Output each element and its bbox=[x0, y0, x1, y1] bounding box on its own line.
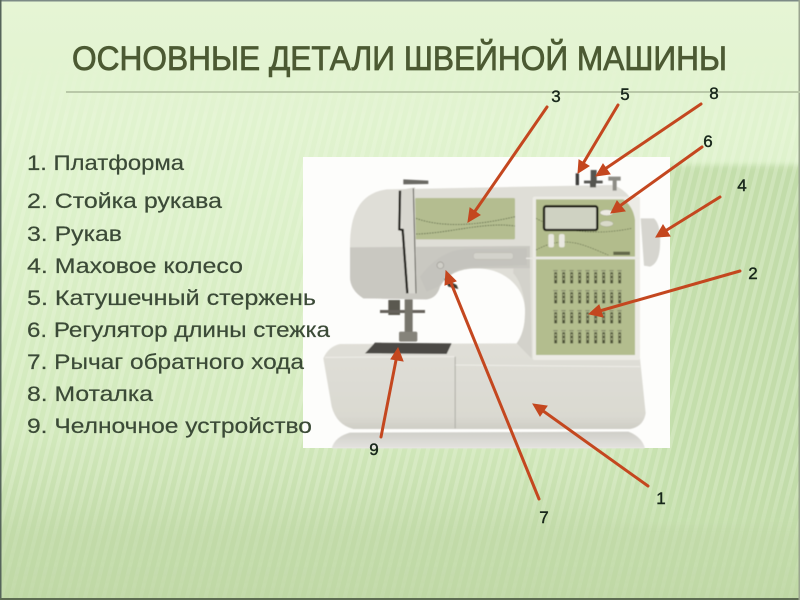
display section bbox=[536, 199, 635, 257]
reverse lever bbox=[444, 278, 458, 289]
machine base bbox=[323, 343, 646, 429]
arm front panel bbox=[415, 198, 515, 239]
reverse lever button bbox=[437, 262, 444, 269]
base top edge bbox=[325, 357, 640, 367]
column side bbox=[513, 268, 532, 358]
number 3: 3 bbox=[551, 87, 561, 106]
arrow 7 bbox=[445, 271, 539, 499]
callout numbers bbox=[369, 84, 758, 527]
machine arm bbox=[350, 185, 640, 359]
sewing machine bbox=[323, 170, 660, 448]
number 7: 7 bbox=[539, 508, 549, 527]
list item 5: 5. Катушечный стержень bbox=[27, 287, 316, 310]
model badge bbox=[613, 252, 630, 255]
number 6: 6 bbox=[703, 132, 713, 151]
number 9: 9 bbox=[369, 440, 379, 459]
arrow 5 bbox=[578, 105, 618, 173]
machine reflection bbox=[332, 432, 645, 448]
list item 1: 1. Платформа bbox=[27, 152, 184, 175]
title: ОСНОВНЫЕ ДЕТАЛИ ШВЕЙНОЙ МАШИНЫ bbox=[72, 40, 727, 78]
arrow 9 bbox=[381, 348, 403, 437]
arrow 4 bbox=[656, 197, 720, 237]
number 2: 2 bbox=[748, 264, 758, 283]
handwheel bbox=[641, 218, 660, 267]
arrows bbox=[381, 104, 740, 499]
number 5: 5 bbox=[620, 85, 630, 104]
number 1: 1 bbox=[656, 489, 666, 508]
arrow 6 bbox=[611, 147, 702, 213]
title rule bbox=[66, 91, 800, 93]
list item 8: 8. Моталка bbox=[27, 383, 153, 406]
thread guide slot bbox=[399, 187, 417, 293]
bobbin winder bbox=[584, 170, 603, 187]
display screen bbox=[544, 206, 597, 230]
spool pin bbox=[576, 173, 579, 185]
photo panel bbox=[303, 157, 670, 448]
front cover pill bbox=[473, 253, 513, 259]
list item 9: 9. Челночное устройство bbox=[27, 415, 312, 438]
arrow 2 bbox=[589, 271, 740, 317]
presser foot assembly bbox=[380, 299, 425, 342]
arrow 8 bbox=[596, 104, 701, 176]
list item 2: 2. Стойка рукава bbox=[27, 190, 222, 213]
divider bbox=[526, 258, 639, 259]
arrow 1 bbox=[533, 404, 648, 486]
list item 3: 3. Рукав bbox=[27, 223, 122, 246]
buttons bbox=[600, 210, 613, 216]
shaded arm band bbox=[350, 246, 530, 299]
number 4: 4 bbox=[737, 176, 747, 195]
dashed decoration bbox=[536, 218, 632, 255]
list item 7: 7. Рычаг обратного хода bbox=[27, 351, 304, 374]
list item 4: 4. Маховое колесо bbox=[27, 255, 243, 278]
arm highlight bbox=[420, 248, 527, 292]
arrow 3 bbox=[468, 107, 547, 222]
stitch chart section bbox=[536, 259, 635, 355]
stitch chart rows bbox=[553, 269, 625, 284]
list item 6: 6. Регулятор длины стежка bbox=[27, 319, 330, 342]
parts list bbox=[27, 152, 330, 438]
number 8: 8 bbox=[709, 84, 719, 103]
needle plate bbox=[365, 343, 452, 354]
second spool pin bbox=[608, 177, 621, 191]
head top bbox=[403, 179, 428, 184]
control column bbox=[526, 197, 640, 360]
base front divider bbox=[454, 357, 457, 428]
